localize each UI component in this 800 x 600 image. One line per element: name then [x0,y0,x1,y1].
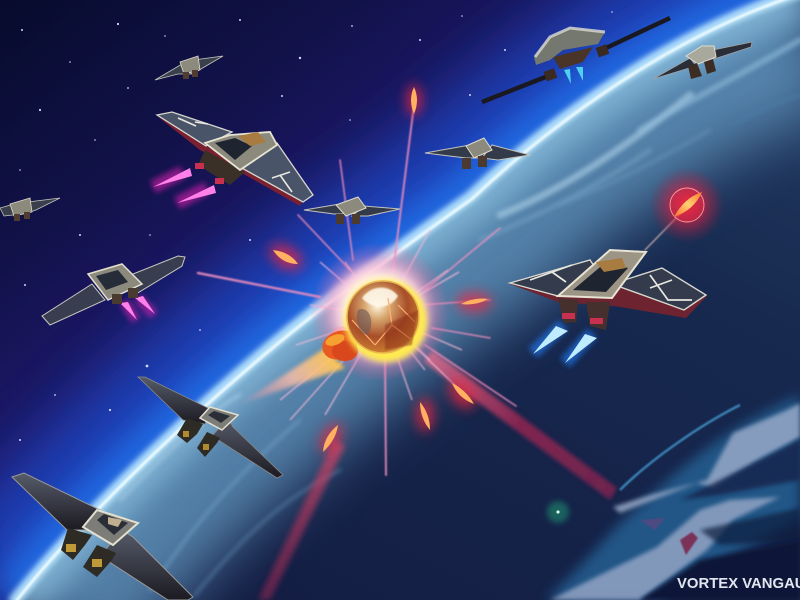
ship: mid left fighter [42,256,185,325]
ship: top centre saucer fighter [482,18,670,102]
red energy bolts [265,84,725,456]
ship: far left fighter [0,198,60,221]
red beams from the explosion [198,105,682,600]
explosion fireball [240,242,450,404]
ship: lower left rear-view fighter [138,377,283,478]
ship: top right fighter [653,42,752,79]
ship: large blue-thrust fighter [510,250,707,363]
ship: bottom left large fighter [12,473,193,600]
ship: large magenta-thrust fighter [153,112,313,206]
explosion rays [280,230,462,420]
ship: centre small fighter [304,197,400,224]
green distant star [547,501,569,523]
ship: centre right small fighter [425,138,530,169]
ship: top left small fighter [155,56,223,80]
